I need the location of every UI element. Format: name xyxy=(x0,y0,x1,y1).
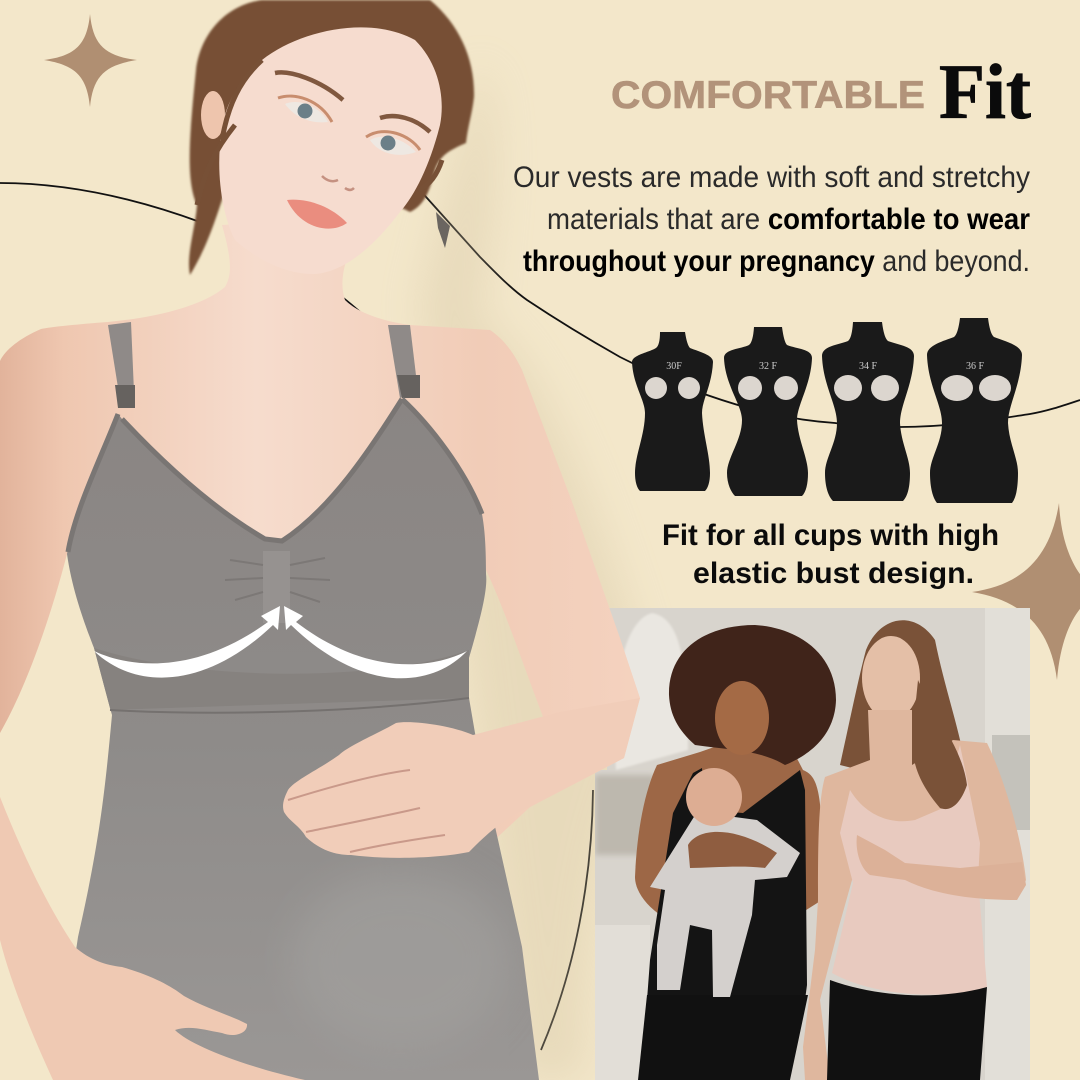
left woman skin xyxy=(635,745,825,917)
text block: description: materials that are comfortable to wear xyxy=(547,203,1030,236)
iris right xyxy=(380,136,396,150)
torso and right arm skin xyxy=(0,215,640,860)
iris left xyxy=(298,104,312,118)
text block: description xyxy=(513,161,1030,278)
heading: Fit xyxy=(939,48,1031,135)
left woman face xyxy=(715,681,769,755)
brows xyxy=(275,72,430,132)
caption: fit for all cups xyxy=(662,519,999,590)
pink camisole xyxy=(832,745,987,995)
strap left xyxy=(108,322,134,400)
eye left xyxy=(285,102,328,122)
icon: star right xyxy=(972,503,1080,680)
upper hand on belly xyxy=(283,698,640,858)
arrow: left white arrow xyxy=(94,606,280,678)
curved line left xyxy=(0,183,372,322)
curved line right xyxy=(418,188,1080,427)
clips xyxy=(115,375,420,408)
mannequin 36F: 36 F xyxy=(966,361,984,372)
hair wisps xyxy=(197,60,442,205)
baby head xyxy=(686,768,742,826)
lips xyxy=(287,200,347,229)
text block: description: throughout your pregnancy and beyond. xyxy=(523,245,1030,278)
photo: two women with baby xyxy=(595,608,1030,1080)
face xyxy=(219,27,442,274)
window panel xyxy=(992,735,1030,830)
icon: star top left xyxy=(44,14,137,107)
caption: fit for all cups: elastic bust design. xyxy=(693,557,974,590)
caption: fit for all cups: Fit for all cups with high xyxy=(662,519,999,552)
mannequin 34F: 34 F xyxy=(859,361,877,372)
hair xyxy=(189,0,474,275)
curved line bottom xyxy=(541,790,593,1050)
main figure: pregnant woman in grey vest xyxy=(0,0,640,1080)
right panel xyxy=(985,608,1030,1080)
grey vest xyxy=(61,399,539,1080)
arrow: right white arrow xyxy=(284,606,467,678)
ear xyxy=(201,91,225,139)
lower hand xyxy=(0,797,305,1080)
heading xyxy=(611,48,1031,135)
eyelids xyxy=(278,96,420,150)
mirror xyxy=(615,613,688,770)
left wall ornament xyxy=(595,775,655,855)
strap right xyxy=(388,325,418,398)
nose shadow xyxy=(322,176,354,190)
right woman skin xyxy=(803,710,1026,1080)
mannequin 30F xyxy=(632,332,713,491)
vest highlight xyxy=(94,648,510,1050)
right woman forearm xyxy=(857,835,1026,900)
mannequin 32F: 32 F xyxy=(759,361,777,372)
afro hair xyxy=(669,625,836,765)
heading: COMFORTABLE xyxy=(611,74,925,117)
armhole bands xyxy=(68,399,482,552)
sink counter xyxy=(595,925,650,1080)
left woman forearm xyxy=(688,832,777,868)
right woman face xyxy=(862,636,920,710)
woman shadow xyxy=(420,60,660,1080)
right woman front hair xyxy=(912,680,967,809)
mannequin 34F xyxy=(822,322,914,501)
centre gather xyxy=(225,551,330,623)
mannequin 30F: 30F xyxy=(666,361,682,372)
black top xyxy=(647,768,807,1000)
right woman leggings xyxy=(827,980,987,1080)
vest neck band xyxy=(122,399,402,541)
earring xyxy=(436,212,450,248)
text block: description: Our vests are made with soft and stretchy xyxy=(513,161,1030,194)
mannequin 32F xyxy=(724,327,812,496)
right woman hair xyxy=(840,620,960,768)
eye right xyxy=(370,137,416,155)
baby body xyxy=(650,812,800,997)
waist seam xyxy=(110,698,469,713)
mannequin 36F xyxy=(927,318,1022,503)
room background xyxy=(595,608,985,1080)
left woman leggings xyxy=(638,995,808,1080)
